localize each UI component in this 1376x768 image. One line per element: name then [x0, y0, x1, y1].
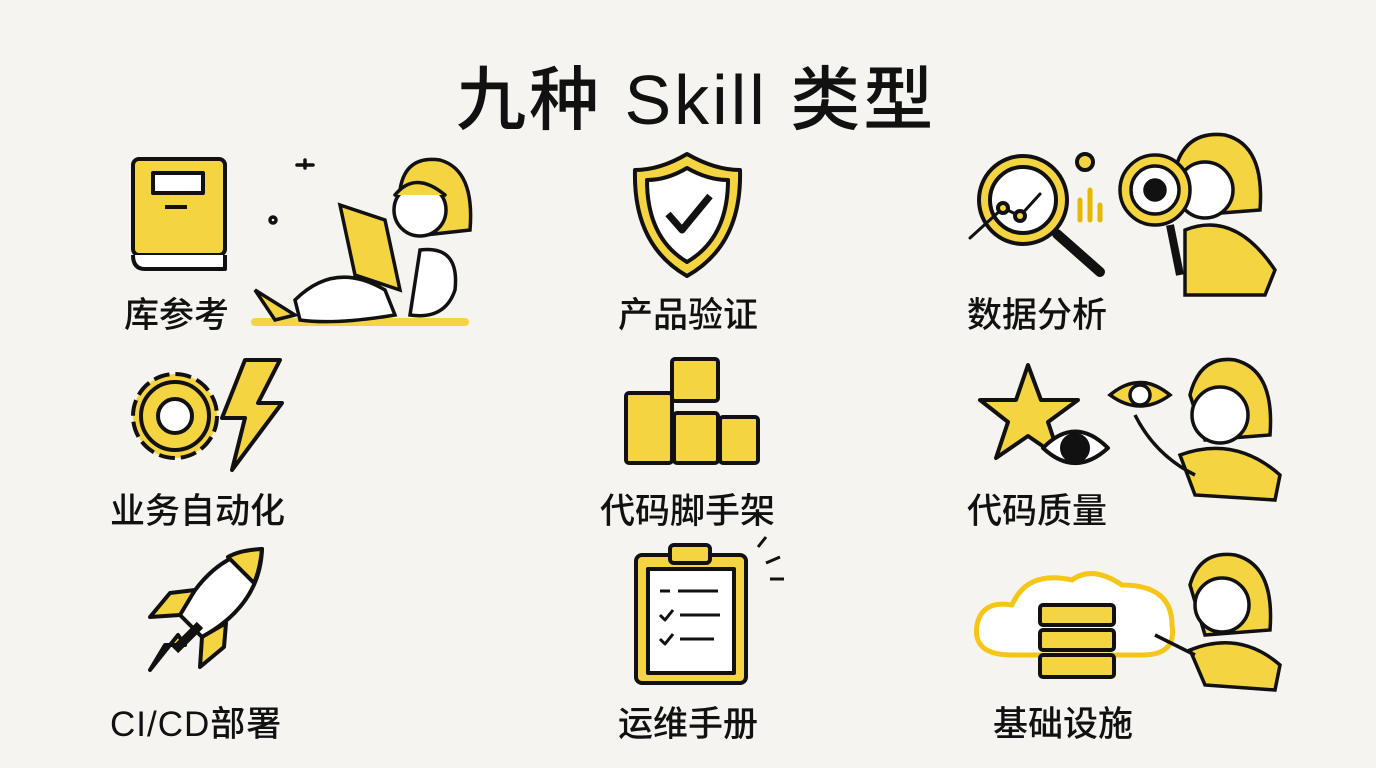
label: 库参考: 库参考 [124, 296, 229, 335]
icon: girl with magnifier [1118, 132, 1277, 297]
label: 产品验证: 产品验证 [618, 296, 758, 335]
label: 运维手册: 运维手册 [618, 705, 758, 744]
icon: girl with cloud [1154, 552, 1282, 692]
icon: clipboard [634, 536, 784, 685]
label: 代码质量: 代码质量 [967, 492, 1107, 531]
label: 数据分析: 数据分析 [967, 296, 1107, 335]
icon: star and eye [978, 363, 1110, 466]
icon: rocket [148, 547, 264, 672]
icon: cloud servers [974, 571, 1176, 679]
label: 基础设施: 基础设施 [993, 705, 1133, 744]
label: 代码脚手架: 代码脚手架 [600, 492, 775, 531]
icon: gear and lightning [131, 358, 284, 472]
label: 业务自动化: 业务自动化 [110, 492, 285, 531]
icon: girl reading [251, 158, 472, 326]
label: CI/CD部署: CI/CD部署 [110, 705, 282, 744]
icon: book [131, 157, 227, 271]
title: 九种 Skill 类型 [456, 61, 936, 139]
icon: puzzle [624, 357, 760, 465]
icon: shield [632, 152, 742, 278]
icon: girl holding eye [1107, 358, 1282, 502]
icon: magnifier chart [968, 152, 1105, 277]
